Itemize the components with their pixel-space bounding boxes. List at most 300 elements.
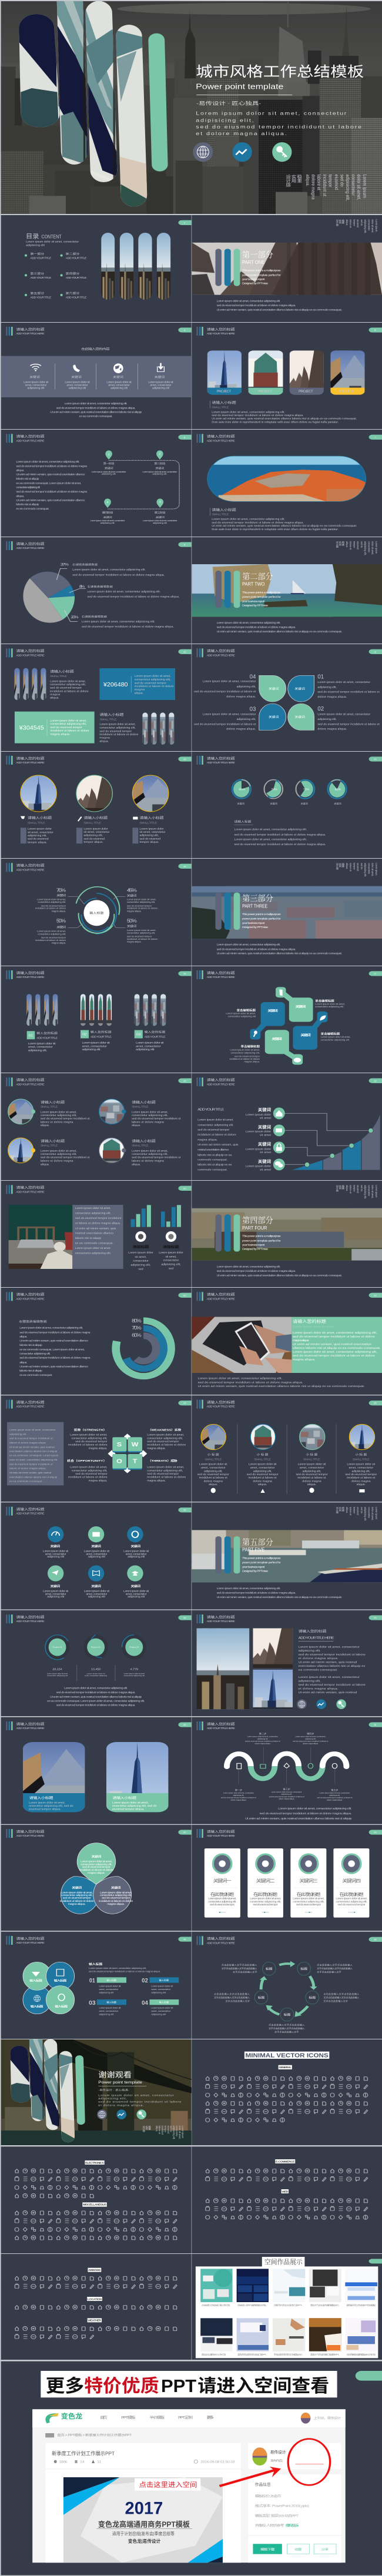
text panel: Ut enim ad minim veniam, quis [75, 1227, 116, 1230]
item 01: 01 [317, 674, 324, 680]
header: 12 [183, 758, 186, 761]
header: 请输入您的标题 [207, 756, 235, 761]
collage text [299, 1629, 366, 1694]
vertical text: 实用 [339, 1184, 342, 1190]
captions row 2: 黑白企业通用2017工作计划 [202, 2353, 226, 2356]
left text: laboris nisi ut aliquip [19, 1369, 42, 1372]
stat 45%: Lorem ipsum dolor sit amet, [127, 899, 156, 900]
header: 7 [374, 437, 376, 438]
section paragraph [217, 300, 342, 311]
title card: 新季度工作计划工作展示PPT [52, 2450, 115, 2457]
item top right: SMALL TITLE [132, 1106, 149, 1108]
item 02: adipisicing elit, [317, 718, 337, 721]
item 04: 04 [250, 674, 256, 680]
threats: Lorem ipsum dolor sit amet, [147, 1466, 184, 1468]
contents list [25, 252, 86, 299]
item 01: 01 [29, 1034, 33, 1037]
step 4 text: 第四步 [307, 1732, 314, 1735]
intro: Lorem ipsum dolor sit amet, consectetur adipiscing elit, [89, 1967, 146, 1969]
weakness: magna aliqua. [147, 1447, 166, 1449]
item 02 [142, 1977, 179, 1994]
click tag [135, 2478, 200, 2491]
stat 45%: sed do eiusmod tempor [127, 905, 152, 907]
blue money card: magna [135, 688, 145, 691]
label bottom left: consectetur adipiscing elit, [231, 1052, 260, 1054]
bottom paragraph: ex ea commodo consequat. [79, 415, 113, 418]
collage text: sed do eiusmod tempor incididunt ut labore [299, 1683, 366, 1687]
header: 请输入您的标题 [207, 327, 235, 331]
chart caption 1: sed [138, 1268, 143, 1270]
header [6, 1185, 192, 1194]
item top left: consectetur adipisicing elit, [41, 1114, 77, 1117]
vertical text [336, 1506, 378, 1521]
header [6, 970, 192, 979]
pins [104, 450, 163, 508]
preview card: 2017 [125, 2499, 163, 2518]
vertical text: consectetur [367, 1507, 371, 1518]
action card: 收藏 [294, 2547, 301, 2551]
column 4: sed do eiusmod tempor [345, 1473, 377, 1476]
step 1 text: 第一步 [235, 1788, 242, 1791]
radial labels [132, 1318, 142, 1338]
header: 请输入您的标题 [207, 1721, 235, 1726]
header: 请输入您的标题 [16, 756, 45, 761]
left paragraph: Ut enim ad minim veniam, quis nostrud exercitation ullamco [16, 473, 85, 476]
card 2: sed do eiusmod tempor [253, 1903, 278, 1906]
breadcrumb [45, 2433, 132, 2437]
item 04: 04 [142, 2000, 149, 2006]
captions row 1: 清新简约风企业宣传汇报PPT... [274, 2304, 303, 2306]
row: slides 18-21 [1, 1073, 382, 1287]
vertical text: adipisicing elit, [364, 1185, 367, 1199]
left paragraph: Lorem ipsum dolor sit amet, consectetur adipisicing elit, [16, 460, 79, 463]
column 3: 小标题 [306, 1452, 318, 1456]
header: ADD YOUR TITLE HERE [16, 1620, 45, 1623]
slide 18: four circle items [1, 1073, 192, 1180]
vertical text columns: dolor sit amet, [356, 175, 362, 200]
slide 38: icon sheet electronics [1, 2146, 192, 2253]
blue block left: 关键词 [267, 1009, 278, 1013]
section description: This power point is a multipurpose [242, 913, 281, 916]
vertical text: sed do [360, 541, 363, 548]
vertical text: 稳重 [342, 541, 345, 546]
info card: 格式版本: PowerPoint 2010(.pptx) [255, 2503, 309, 2508]
stat 70%: magna aliqua. [52, 910, 66, 912]
item top left: Lorem ipsum dolor sit amet, [41, 1111, 77, 1113]
vertical text: eiusmod [357, 863, 360, 872]
vertical text: tempor [353, 1507, 356, 1514]
card 2: Lorem ipsum dolor sit amet, [250, 1897, 281, 1900]
column texts: tempor aliqua. [83, 840, 103, 843]
section description: Designed by PPTmiao [242, 604, 269, 607]
header: 35 [374, 1939, 377, 1941]
vertical text: Lorem ipsum [375, 219, 378, 232]
bottom paragraph: Ut enim ad minim veniam, quis nostrud exercitation ullamco laboris nisi ut aliquip ex ea commodo consequat. [198, 1385, 365, 1388]
title card: 14 [80, 2461, 85, 2464]
blue block left [250, 1002, 285, 1040]
section paragraph: Lorem ipsum dolor sit amet, consectetur adipisicing elit. [217, 943, 280, 946]
slide 37: icon sheet general [192, 2039, 382, 2145]
section paragraph: Lorem ipsum dolor sit amet, consectetur adipisicing elit. [217, 300, 280, 302]
slide 22: radial bars [1, 1288, 192, 1395]
step 5 text: adipisicing elit. [329, 1794, 340, 1796]
header: 请输入您的标题 [16, 1400, 45, 1405]
section description: your business report [242, 1566, 265, 1568]
blue money card: Lorem ipsum dolor sit amet, [135, 675, 171, 678]
left text: aliqua. [19, 1361, 27, 1364]
left paragraph: laboris nisi ut aliquip [16, 503, 39, 506]
label 37%: 37% [61, 562, 69, 567]
stage labels [91, 462, 178, 524]
item 02: amet, consectetur [82, 1045, 107, 1048]
slide 12: three circles [1, 752, 192, 858]
text panel: Ut enim ad minim veniam, quis nostrud [9, 1472, 51, 1474]
stat 50% left: 关键词 [56, 925, 66, 929]
icon grid [203, 2074, 370, 2124]
bottom paragraph [50, 402, 142, 418]
captions row 2: 水彩风格多彩通用模板2017工作计划 [346, 2353, 376, 2356]
item 01: adipiscing elit [99, 1992, 114, 1994]
text panel: Ut enim ad minim veniam, quis nostrud [9, 1446, 55, 1448]
pie labels: 关键词 [334, 802, 341, 805]
header: 请输入您的标题 [16, 1507, 45, 1512]
bridge pills [8, 2039, 85, 2145]
label 20%: sed do eiusmod tempor incididunt ut labore et dolore magna aliqua. [82, 625, 174, 628]
column 1: sed do eiusmod tempor [197, 1473, 229, 1476]
column texts: tempor aliqua. [139, 840, 159, 843]
section heading: PART THREE [242, 903, 267, 909]
section paragraph: Ut enim ad minim veniam, quis nostrud exercitation ullamco laboris nisi ut aliquip ex ea commodo consequat. [217, 630, 342, 633]
collage text: ea commodo consequat. [299, 1669, 338, 1671]
label e-commerce [275, 2159, 295, 2163]
item top right: Lorem ipsum dolor sit amet, [132, 1111, 168, 1113]
header [6, 541, 192, 550]
step 4 text: sed do eiusmod tempor incididunt ut labore et [293, 1740, 329, 1743]
thanks title: 谢谢观看 [98, 2071, 132, 2079]
column 4: adipisicing elit, [352, 1470, 370, 1472]
section description: your business report [242, 278, 265, 281]
contents intro [26, 240, 79, 246]
label miscellaneous [82, 2202, 107, 2207]
card 4: PROJECT [340, 390, 354, 393]
text block: Lorem ipsum dolor sit amet, consectetur adipisicing elit. [234, 828, 307, 831]
node labels: 标题 [300, 1967, 308, 1971]
stat 50% left: 50% [56, 919, 66, 923]
white panel [196, 2266, 378, 2358]
header [6, 1721, 192, 1730]
label left: 单击编辑标题 [237, 1009, 256, 1012]
blue money card: incididunt ut labore et dolore [135, 685, 174, 688]
contents list: 第三部分 [30, 272, 45, 276]
green card: eiusmod tempor aliqua. [112, 1808, 145, 1811]
vertical text columns: consectetur [350, 175, 356, 196]
card 1: PROJECT [217, 390, 232, 393]
column texts: sed do eiusmod [83, 838, 105, 840]
header [6, 648, 192, 657]
keyword texts: Lorem ipsum dolor sit [24, 381, 49, 384]
column 3: SMALL TITLE [303, 1458, 321, 1461]
section description [242, 591, 281, 607]
circle photos [21, 775, 169, 812]
intro [89, 1962, 160, 1972]
gray petal text [99, 1885, 133, 1905]
header: ADD YOUR TITLE HERE [207, 1405, 235, 1408]
left paragraph: ex ea commodo consequat. Lorem ipsum dolor sit amet, [16, 482, 81, 484]
step 4 text: adipisicing elit. [305, 1738, 316, 1740]
vertical text: dolore et [349, 219, 353, 228]
section photo [192, 1530, 382, 1582]
captions row 2: 黑金大气简洁风格汇报通用PPT... [310, 2353, 340, 2356]
vertical text: tempor [353, 863, 356, 870]
icon labels: 关键词 [258, 1107, 271, 1112]
pins: 2 [159, 453, 161, 455]
header: ADD YOUR TITLE HERE [207, 332, 235, 335]
item 01: Lorem ipsum dolor sit [28, 1042, 56, 1046]
green panel: Ut enim ad minim veniam, quis nostrud exercitation [293, 1343, 371, 1346]
text panel: consectetur adipisicing elit. [75, 1252, 111, 1254]
slide 16: three strip groups [1, 966, 192, 1073]
text block top: SMALL TITLE [50, 675, 67, 678]
item 01: amet, consectetur [28, 1046, 53, 1049]
header: ADD YOUR TITLE HERE [207, 654, 235, 656]
card 3: sed do eiusmod tempor [296, 1903, 321, 1906]
left paragraph [16, 460, 88, 510]
node descriptions: 点击此处输入文字点击此处输入 [214, 1992, 250, 1995]
hero subtitle: Power point template [196, 83, 283, 91]
green money card: incididunt ut labore et dolore [51, 729, 89, 732]
green petal text [79, 1854, 113, 1874]
bottom paragraph: sed do eiusmod tempor incididunt ut labore et dolore magna aliqua. [56, 407, 136, 409]
item bottom left: aliqua. [41, 1163, 49, 1165]
card 2: 关键词二 [256, 1878, 275, 1883]
green money card: sed do eiusmod tempor [51, 726, 82, 729]
left text: laboris nisi ut aliquip [19, 1344, 42, 1346]
chart caption 1: sit amet, [135, 1255, 146, 1258]
bottom paragraph: sed do eiusmod tempor incididunt ut labore et dolore magna aliqua. [56, 1691, 136, 1694]
vertical text: eiusmod [357, 1507, 360, 1515]
vertical text [336, 1184, 378, 1199]
text panel: sed do eiusmod tempor incididunt ut [9, 1438, 53, 1440]
cluster icons and labels: 输入标题 [55, 2004, 68, 2008]
icon captions: adipiscing elit [47, 1555, 65, 1558]
vertical text: eiusmod [357, 1185, 360, 1194]
section paragraph [217, 943, 342, 955]
label electronics [85, 2160, 105, 2165]
right paragraph [245, 1807, 352, 1820]
vertical text: consectetur [176, 2126, 179, 2137]
blue card: Lorem ipsum dolor sit amet, [29, 1801, 65, 1804]
left paragraph: sed do eiusmod tempor incididunt ut labore et dolore magna [16, 465, 88, 467]
aerial strips [142, 712, 174, 745]
item top right: 请输入小标题 [132, 1100, 156, 1104]
thumbnail row 1 [200, 2269, 377, 2302]
column texts: adipisicing elit, [139, 834, 159, 837]
label top right: consectetur adipiscing elit [315, 1006, 344, 1008]
row: slides 26-29 [1, 1502, 382, 1716]
card 4: consectetur adipiscing elit, [336, 1900, 367, 1903]
text panel: ex ea commodo consequat. [9, 1480, 43, 1483]
step 5 text: Lorem ipsum dolor sit amet, consectetur [320, 1792, 350, 1794]
green money card: Lorem ipsum dolor sit amet, [51, 719, 86, 722]
label top right: 单击编辑标题 [315, 999, 334, 1003]
left text: consectetur adipisicing elit. [19, 1352, 51, 1355]
contents list: ADD YOUR TITLE [66, 257, 86, 259]
vertical text: 稳重 [342, 1184, 345, 1190]
step 4 text: Lorem ipsum dolor sit amet, consectetur [295, 1736, 326, 1738]
column texts: SMALL TITLE [83, 822, 102, 825]
slide 6: timeline [1, 430, 192, 537]
action card: 分享 [321, 2547, 329, 2551]
product stats: Lorem ipsum dolor sit amet [47, 1673, 68, 1675]
category label [279, 2065, 292, 2069]
header [6, 1614, 192, 1623]
text block top: incididunt ut labore et dolore [50, 690, 89, 692]
column 2: adipisicing elit, [253, 1470, 272, 1472]
header: 8 [184, 544, 185, 546]
column 4 [345, 1452, 377, 1486]
icon captions: Lorem ipsum dolor sit [123, 1590, 149, 1592]
petals [259, 675, 314, 730]
node descriptions: 文字点击此处输入文字 [323, 1999, 348, 2002]
step 3 text: Lorem ipsum dolor sit amet, consectetur [272, 1791, 302, 1793]
node descriptions [214, 1964, 360, 2034]
opportunity: sed do eiusmod tempor [75, 1472, 108, 1475]
step 4 text [293, 1732, 329, 1745]
vertical text: sed do [360, 863, 363, 870]
left text: laboris nisi ut aliquip ex ea [197, 1154, 232, 1156]
section description: your business report [242, 922, 265, 924]
item 01: adipisicing elit, [317, 686, 337, 689]
radial labels: 80% [132, 1318, 142, 1324]
column 2: sed do eiusmod tempor [247, 1473, 279, 1476]
stat 50% left [35, 919, 66, 944]
product stats: consectetur adipiscing elit [124, 1674, 145, 1677]
strength: sed do eiusmod tempor [75, 1440, 108, 1443]
header: 5 [374, 329, 376, 331]
website screenshot [32, 2409, 346, 2562]
dotted route [108, 460, 179, 509]
wave [227, 1754, 346, 1778]
item 04: adipisicing elit, [237, 685, 256, 688]
header: 23 [374, 1295, 377, 1297]
column 2: aliqua. [258, 1483, 267, 1486]
slide 23: laptop photo panel [192, 1288, 382, 1395]
showcase title [262, 2257, 304, 2267]
column 2: dolore magna [253, 1480, 272, 1482]
blue card: eiusmod tempor aliqua. [29, 1808, 61, 1811]
item bottom right: 请输入小标题 [132, 1138, 156, 1143]
vertical text: dolore et [349, 1507, 353, 1516]
icon captions: Lorem ipsum dolor sit [43, 1550, 69, 1552]
bottom paragraph [198, 1377, 365, 1388]
icon captions: 关键词 [51, 1584, 60, 1588]
item 03: adipiscing elit [99, 2014, 114, 2016]
collage text: 请输入您的标题 [299, 1629, 327, 1633]
section description: This power point is a multipurpose [242, 591, 281, 594]
step 2 text: dolore magna aliqua. [255, 1743, 271, 1745]
green petal text: magna aliqua. [88, 1871, 105, 1874]
radial bar chart [116, 1321, 171, 1376]
item top right: labore et dolore magna [132, 1121, 164, 1123]
circle photos [201, 1424, 375, 1450]
stat 70% [35, 887, 66, 912]
chart caption 2: sit amet, [165, 1255, 177, 1258]
left text: sed do eiusmod tempor [197, 1128, 230, 1131]
section paragraph: Ut enim ad minim veniam, quis nostrud exercitation ullamco laboris nisi ut aliquip ex ea commodo consequat. [217, 952, 342, 955]
column 3: incididunt ut labore et [297, 1476, 326, 1479]
header: 请输入您的标题 [16, 1936, 45, 1941]
captions row 1 [202, 2304, 376, 2306]
section paragraph: Ut enim ad minim veniam, quis nostrud exercitation ullamco laboris nisi ut aliquip ex ea commodo consequat. [217, 1274, 342, 1277]
column 4: incididunt ut labore et [347, 1476, 376, 1479]
step 3 text [269, 1788, 304, 1800]
column 1: adipisicing elit, [204, 1470, 223, 1472]
vertical text [336, 219, 378, 233]
vertical text: Lorem ipsum [182, 2126, 185, 2138]
keyword texts: amet, consectetur [108, 384, 130, 387]
header [197, 1614, 382, 1623]
icon labels: Lorem ipsum dolor [246, 1113, 272, 1116]
header: 请输入您的标题 [16, 1614, 45, 1619]
vertical text: dolor sit amet, [371, 1185, 374, 1198]
green panel: 请输入您的标题 [293, 1318, 326, 1324]
text block top: consectetur adipisicing elit, [50, 683, 86, 686]
section description: power point template perfect for [242, 274, 281, 276]
keyword texts: amet, consectetur [66, 384, 88, 387]
header [197, 1400, 382, 1409]
text block: Lorem ipsum dolor sit amet, consectetur adipisicing elit. [234, 838, 307, 841]
info card: 侵权投诉 [286, 2523, 299, 2528]
left paragraph: sed do eiusmod tempor incididunt ut labore et dolore magna [16, 490, 88, 493]
intro: 输入标题 [89, 1962, 103, 1966]
vertical text: aliqua. [156, 2126, 159, 2132]
hero title: 城市风格工作总结模板 [196, 63, 364, 79]
vertical text columns: tempor [327, 175, 333, 187]
petal labels: 关键词 [294, 686, 305, 691]
header: 请输入您的标题 [16, 541, 45, 546]
vertical text: adipisicing elit, [364, 863, 367, 877]
section heading: 第一部分 [242, 250, 273, 260]
promo banner: PPT [161, 2376, 196, 2396]
collage icons [297, 1699, 346, 1709]
column 1: 小标题 [207, 1452, 220, 1456]
weakness: incididunt ut labore et dolore [147, 1443, 186, 1446]
icon captions: amet, consectetur [86, 1553, 108, 1555]
item bottom left: SMALL TITLE [41, 1144, 58, 1147]
header: ADD YOUR TITLE HERE [16, 1512, 45, 1515]
step 3 text: adipisicing elit. [281, 1793, 292, 1796]
icon labels [246, 1107, 272, 1171]
label bottom left: magna aliqua. [244, 1061, 260, 1063]
preview card [46, 2470, 241, 2562]
collage text: adipisicing elit. [299, 1680, 321, 1683]
pie 1 [232, 780, 251, 799]
green card [106, 1742, 168, 1812]
text panel: exercitation ullamco laboris nisi ut aliquip [9, 1476, 57, 1478]
header: 请输入您的标题 [207, 1614, 235, 1619]
header: ADD YOUR TITLE HERE [16, 654, 45, 656]
pins: 3 [159, 501, 161, 504]
blue petal text: incididunt ut labore et dolore [60, 1900, 94, 1902]
left text: sed do eiusmod tempor incididunt ut labore et dolore magna [19, 1331, 91, 1334]
item 03: 03 [250, 706, 256, 712]
item 01 [89, 1977, 126, 1994]
item bottom left: sed do eiusmod tempor incididunt ut [41, 1156, 91, 1159]
section bars [216, 1536, 240, 1573]
keyword band [1, 356, 192, 397]
promo banner: 特价优质 [84, 2376, 159, 2396]
blue petal text: 关键词 [72, 1885, 82, 1890]
